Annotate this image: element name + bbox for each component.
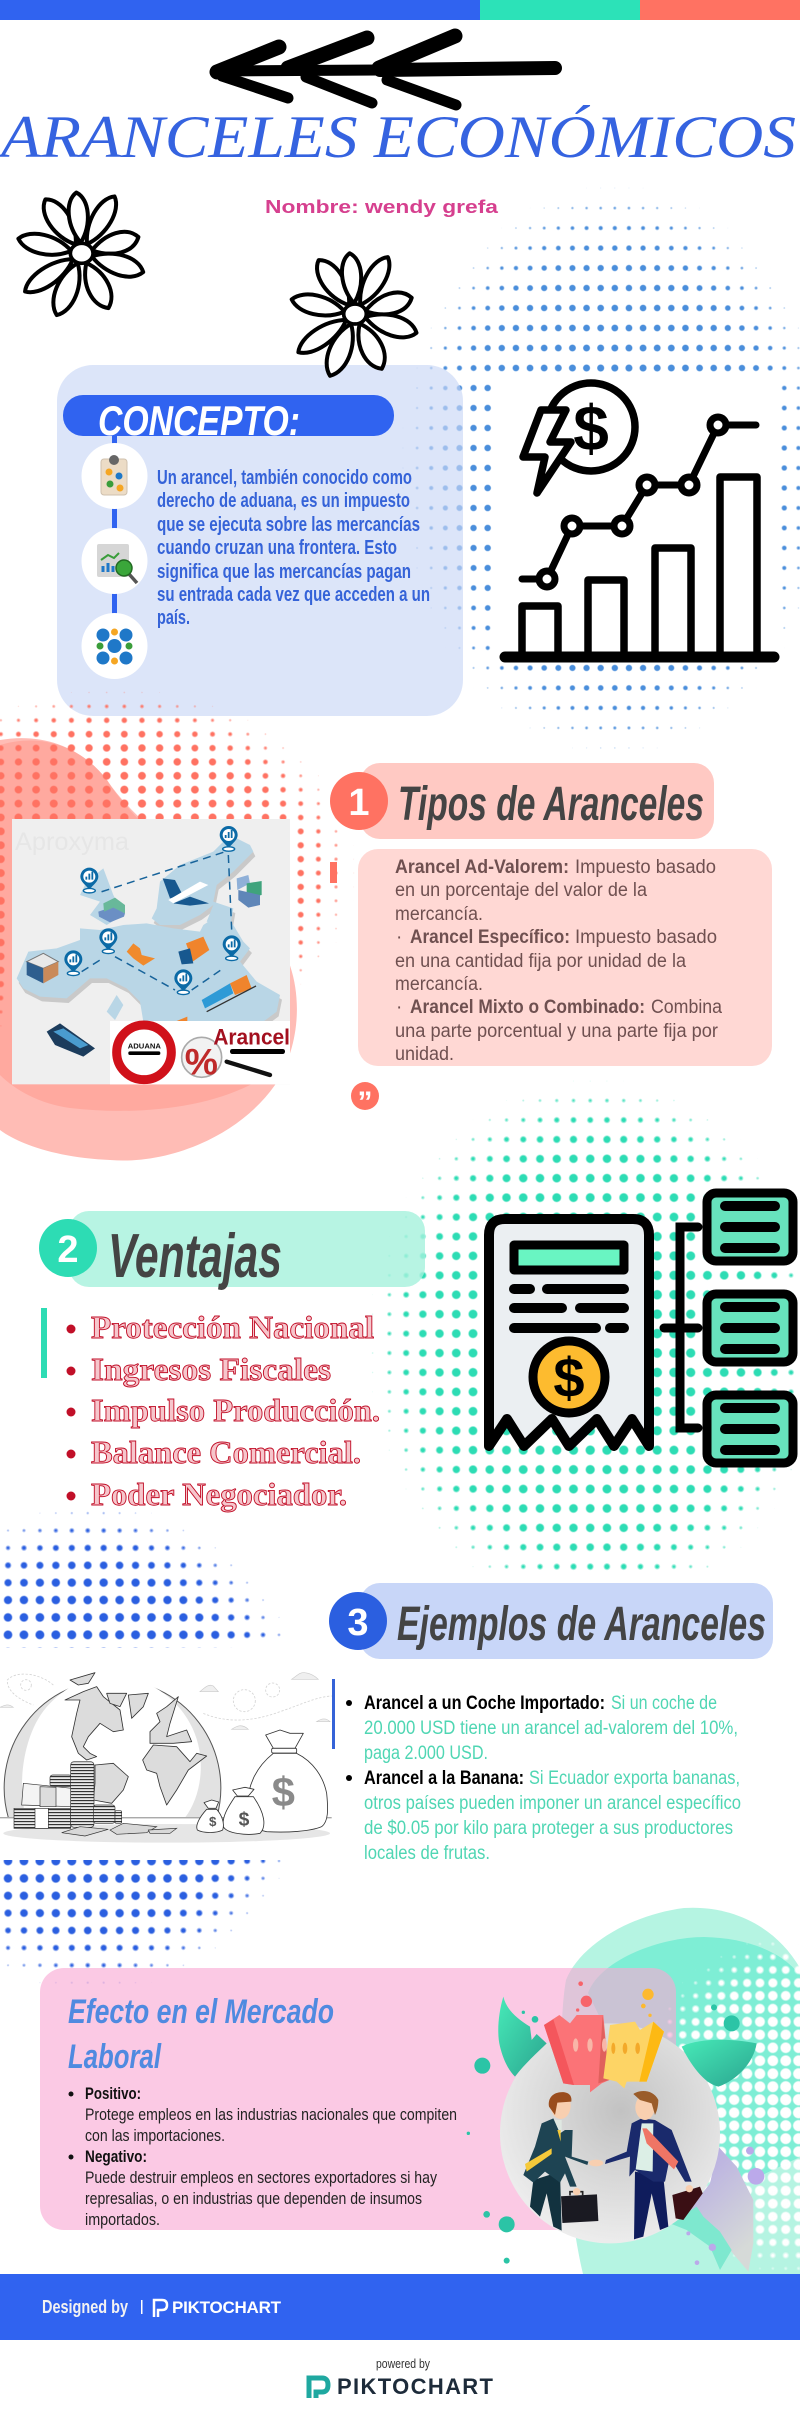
list: ejemplos: 20.000 USD tiene un arancel ad-valorem del 10%,: [364, 1718, 738, 1739]
list: ventajas: [66, 1309, 380, 1512]
money bags: [197, 1730, 328, 1834]
warehouse: [27, 953, 58, 983]
panel: tipos de aranceles: Impuesto basado: [575, 927, 717, 948]
list: ventajas: Protección Nacional: [91, 1309, 374, 1345]
coin stacks and cash: [14, 1762, 177, 1836]
image: globe and money: $: [272, 1769, 295, 1816]
list: ejemplos: de $0.05 por kilo para proteger a sus productores: [364, 1818, 733, 1839]
section 2 heading: [39, 1211, 425, 1291]
panel: tipos de aranceles: en una cantidad fija por unidad de la: [395, 951, 686, 972]
teal lobe: [670, 2207, 732, 2270]
panel text: represalias, o en industrias que dependen de insumos: [85, 2189, 422, 2208]
panel: efecto en el mercado laboral: [40, 1968, 676, 2230]
panel heading: Efecto en el Mercado: [68, 1993, 334, 2031]
list: ejemplos: otros países pueden imponer un arancel específico: [364, 1793, 741, 1814]
concept text: Un arancel, también conocido como: [157, 467, 412, 489]
section 1 heading: 1: [348, 782, 370, 824]
halftone dots: blue top right: [395, 180, 800, 760]
blob: teal background: [561, 1908, 800, 2274]
concept text: [157, 467, 430, 629]
panel: tipos de aranceles: mercancía.: [395, 904, 483, 925]
icon: clipboard: [82, 443, 148, 509]
handshake: [589, 2160, 603, 2166]
globe: [4, 1680, 221, 1818]
image: globe and money: [0, 1648, 333, 1860]
list: ejemplos: Si Ecuador exporta bananas,: [529, 1768, 740, 1789]
panel text: Negativo:: [85, 2147, 147, 2166]
forklift: [127, 943, 155, 966]
concept text: cuando cruzan una frontera. Esto: [157, 537, 397, 559]
map land: [19, 840, 282, 1026]
section 2 heading: Ventajas: [108, 1222, 282, 1291]
image: customs map: [12, 819, 290, 1084]
section 2 heading: 2: [57, 1229, 79, 1271]
decorative bubbles: [467, 2004, 740, 2264]
left leaf: [498, 1997, 547, 2077]
red speech bubble: [544, 2015, 609, 2092]
concept text: significa que las mercancías pagan: [157, 561, 411, 583]
list: ventajas: Impulso Producción.: [91, 1392, 380, 1428]
image: globe and money: $: [239, 1810, 250, 1831]
ship: [47, 1023, 95, 1057]
icon: flower center: [290, 252, 419, 380]
accent bar coral: [330, 862, 337, 883]
halftone dots: coral: [0, 692, 354, 1026]
panel: tipos de aranceles: [358, 849, 772, 1066]
list: ventajas: Balance Comercial.: [91, 1434, 361, 1470]
list: ejemplos: Arancel a la Banana:: [364, 1768, 524, 1789]
panel: tipos de aranceles: una parte porcentual y una parte fija por: [395, 1021, 719, 1042]
list: ventajas: Ingresos Fiscales: [91, 1351, 331, 1387]
panel: tipos de aranceles: unidad.: [395, 1044, 454, 1065]
concept text: país.: [157, 607, 190, 629]
illustration: business handshake: [467, 1981, 764, 2272]
icon: logo teal: [309, 2378, 328, 2398]
footer bar: [0, 2274, 800, 2340]
train: [202, 975, 256, 1012]
panel: tipos de aranceles: ·: [396, 927, 402, 948]
icon: quote: [351, 1082, 379, 1119]
plane: [163, 878, 209, 906]
arrow brush stroke: [217, 36, 555, 105]
blob: coral background: [0, 738, 297, 1161]
list: ejemplos: Arancel a un Coche Importado:: [364, 1693, 605, 1714]
panel text: con las importaciones.: [85, 2126, 225, 2145]
panel: tipos de aranceles: Impuesto basado: [575, 857, 716, 878]
list: ejemplos: [346, 1693, 741, 1864]
panel text: [68, 2084, 457, 2229]
panel heading: [68, 1993, 334, 2076]
list: ejemplos: locales de frutas.: [364, 1843, 490, 1864]
purple leaf: [687, 2147, 753, 2272]
panel: tipos de aranceles: en un porcentaje del valor de la: [395, 880, 647, 901]
title: ARANCELES ECONÓMICOS: [0, 104, 796, 170]
image: customs map: Arancel: [213, 1024, 290, 1049]
halftone dots: blue bottom left: [3, 1512, 281, 1984]
panel: tipos de aranceles: Arancel Mixto o Combinado:: [410, 997, 645, 1018]
halftone dots: teal: [372, 1080, 794, 1570]
icon: growth chart with dollar: $: [573, 392, 609, 464]
customs badges: [110, 1021, 290, 1084]
powered by: PIKTOCHART: [337, 2374, 494, 2399]
concept text: que se ejecuta sobre las mercancías: [157, 514, 420, 536]
concept heading: CONCEPTO:: [98, 397, 300, 444]
image: customs map: Aproxyma: [15, 828, 130, 856]
icon: flower left: [16, 192, 146, 319]
section 3 heading: [329, 1583, 773, 1659]
image: customs map: %: [185, 1040, 218, 1082]
icon: quote: ”: [358, 1086, 372, 1119]
list: ejemplos: paga 2.000 USD.: [364, 1743, 488, 1764]
top color bar: [0, 0, 800, 20]
map pins: [220, 826, 238, 851]
icon: receipt with cards: [489, 1193, 793, 1463]
icon: receipt with cards: $: [553, 1346, 585, 1409]
list: ventajas: Poder Negociador.: [91, 1476, 347, 1512]
icon: growth chart with dollar: [497, 378, 775, 662]
icon: network: [82, 613, 148, 679]
section 3 heading: 3: [347, 1602, 369, 1644]
panel: tipos de aranceles: Arancel Ad-Valorem:: [395, 857, 569, 878]
list: ejemplos: Si un coche de: [611, 1693, 717, 1714]
image: globe and money: $: [209, 1814, 217, 1829]
panel text: importados.: [85, 2210, 160, 2229]
icon: chart and magnifier: [82, 528, 148, 594]
halftone dots: white: [656, 1942, 800, 2270]
footer bar: PIKTOCHART: [172, 2298, 282, 2317]
panel text: Positivo:: [85, 2084, 141, 2103]
continents: [65, 1673, 207, 1805]
image: customs map: ADUANA: [128, 1041, 161, 1050]
accent bar teal: [41, 1308, 47, 1378]
footer bar: Designed by: [42, 2297, 128, 2317]
panel: tipos de aranceles: Combina: [651, 997, 722, 1018]
truck: [178, 937, 209, 964]
containers: [98, 875, 262, 922]
sky decoration: [7, 1674, 332, 1720]
yellow speech bubble: [603, 2022, 664, 2088]
panel text: Protege empleos en las industrias nacionales que compiten: [85, 2105, 457, 2124]
right leaf: [682, 2040, 757, 2087]
accent bar blue: [332, 1679, 335, 1749]
author name: Nombre: wendy grefa: [265, 197, 499, 217]
powered by: powered by: [376, 2356, 430, 2371]
panel: concepto: [57, 365, 463, 716]
panel text: Puede destruir empleos en sectores exportadores si hay: [85, 2168, 437, 2187]
panel: tipos de aranceles: Arancel Específico:: [410, 927, 570, 948]
panel: tipos de aranceles: ·: [396, 997, 402, 1018]
panel heading: Laboral: [68, 2038, 162, 2076]
concept text: su entrada cada vez que acceden a un: [157, 584, 430, 606]
icon: logo white: [154, 2300, 167, 2317]
powered by: [309, 2356, 494, 2399]
timeline: [112, 430, 117, 630]
right man: [605, 2091, 703, 2239]
left man: [523, 2092, 598, 2231]
section 1 heading: [330, 763, 714, 839]
concept text: derecho de aduana, es un impuesto: [157, 490, 410, 512]
panel: tipos de aranceles: mercancía.: [395, 974, 483, 995]
